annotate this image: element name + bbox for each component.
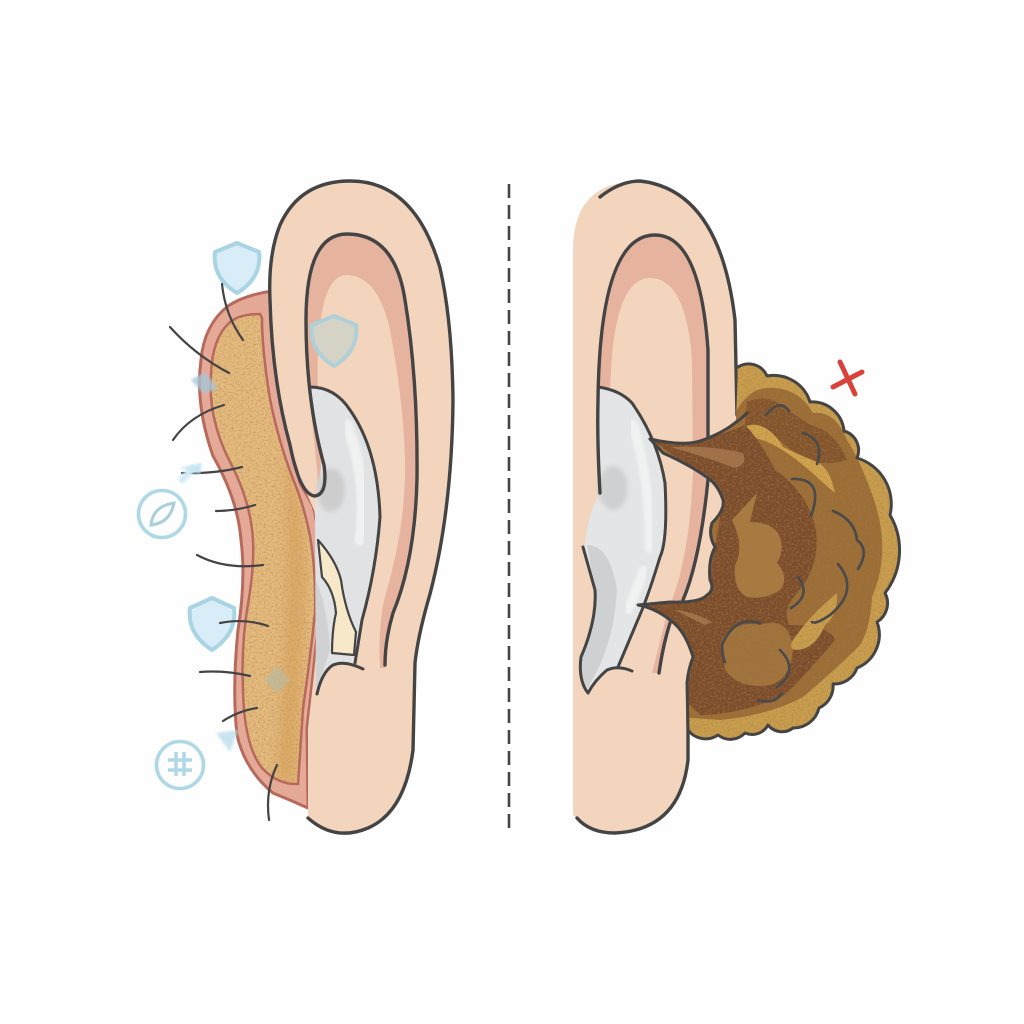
icon: red cross [833, 362, 862, 394]
inner cream fold [318, 275, 405, 668]
concha [580, 387, 666, 693]
ear skin [270, 181, 453, 833]
inner pink fold [598, 235, 708, 673]
hairs [170, 284, 277, 820]
inner outline [598, 235, 708, 673]
concha [310, 387, 380, 694]
ear outline [270, 181, 453, 833]
concha highlight and shadow [316, 425, 362, 690]
ear canal [318, 540, 356, 655]
icon: faded arrowheads and marks [180, 372, 290, 752]
icon: shield on ear [312, 316, 356, 366]
wax lining tissue [200, 291, 322, 808]
panel: blocked ear with wax mass [573, 181, 920, 833]
wax mass [636, 362, 902, 741]
concha outline [580, 387, 666, 693]
concha outline [310, 387, 380, 694]
inner pink fold [306, 234, 417, 668]
ear outline [577, 181, 737, 833]
inner cream fold [610, 278, 693, 673]
icon: cross badge [156, 742, 204, 788]
ear skin [573, 181, 737, 833]
infographic: ear comparison [136, 179, 902, 835]
panel: healthy ear with wax lining [138, 181, 453, 833]
divider: dashed line [508, 184, 510, 828]
icon: shield lower [190, 598, 234, 650]
icon: shield top [215, 243, 259, 293]
wax texture curls [722, 405, 864, 701]
concha highlight and shadow [580, 425, 650, 688]
icon: leaf badge [138, 466, 195, 538]
